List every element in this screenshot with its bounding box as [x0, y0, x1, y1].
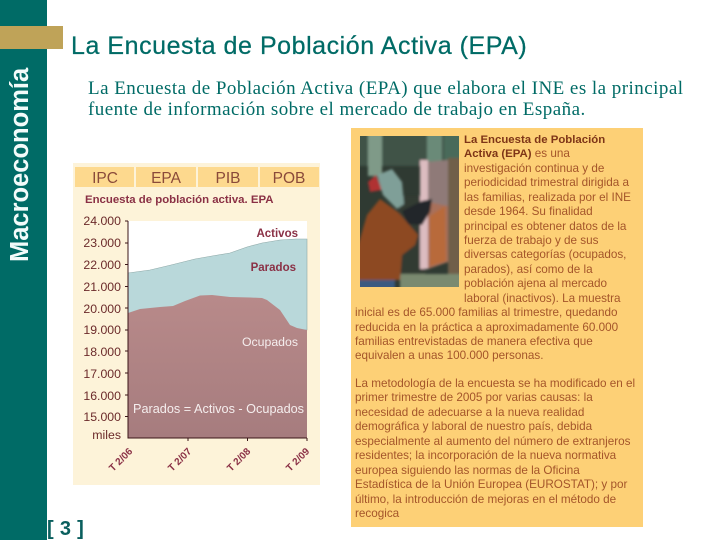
y axis: 18.000 — [83, 345, 121, 359]
body text — [355, 134, 635, 520]
body text: primer trimestre de 2005 por varias causas: la — [355, 391, 593, 404]
sidebar band — [0, 0, 47, 540]
body text: recogica — [355, 507, 399, 520]
body text: desde 1964. Su finalidad — [464, 205, 593, 218]
intro text — [88, 78, 684, 120]
tabs: PIB — [216, 170, 240, 187]
y axis: 17.000 — [83, 367, 121, 381]
tabs: IPC — [92, 170, 118, 187]
y axis: 15.000 — [83, 410, 121, 424]
series labels: Activos — [256, 228, 298, 240]
chart heading: Encuesta de población activa. EPA — [85, 194, 273, 206]
tabs: EPA — [151, 170, 182, 187]
body text: La Encuesta de Población — [464, 134, 605, 146]
y axis: 19.000 — [83, 323, 121, 337]
body text: las familias, realizada por el INE — [464, 191, 631, 204]
x axis labels: T 2/09 — [284, 446, 312, 474]
y axis — [83, 214, 307, 442]
tabs — [75, 167, 319, 187]
gold accent bar — [0, 26, 63, 49]
x axis labels: T 2/08 — [225, 446, 253, 474]
y axis: 21.000 — [83, 280, 121, 294]
body text: La metodología de la encuesta se ha modificado en el — [355, 377, 635, 390]
y axis: 24.000 — [83, 214, 121, 228]
body text: principal es obtener datos de la — [464, 220, 626, 233]
body text: investigación continua y de — [464, 162, 604, 175]
body text: reducida en la práctica a aproximadamente 60.000 — [355, 321, 618, 334]
x axis labels: T 2/06 — [107, 446, 135, 474]
body text: Estadística de la Unión Europea (EUROSTAT); y por — [355, 478, 627, 491]
x axis labels: T 2/07 — [166, 446, 194, 474]
sidebar label: Macroeconomía: Macroeconomía — [6, 68, 34, 262]
body text: periodicidad trimestral dirigida a — [464, 176, 629, 189]
x axis labels — [107, 446, 312, 474]
body text: especialmente al aumento del número de extranjeros — [355, 435, 630, 448]
y axis: 16.000 — [83, 389, 121, 403]
intro text: La Encuesta de Población Activa (EPA) que elabora el INE es la principal — [88, 78, 684, 99]
intro text: fuente de información sobre el mercado de trabajo en España. — [88, 99, 586, 120]
body text: fuerza de trabajo y de sus — [464, 234, 598, 247]
series labels: Ocupados — [242, 335, 298, 349]
panel: explanatory text — [351, 128, 643, 527]
body text: último, la introducción de mejoras en el método de — [355, 493, 616, 506]
photo: welder — [360, 136, 459, 287]
body text: europea siguiendo las normas de la Oficina — [355, 464, 580, 477]
formula: Parados = Activos - Ocupados — [133, 402, 304, 416]
y axis: 23.000 — [83, 236, 121, 250]
panel: EPA chart — [73, 163, 320, 485]
body text: población ajena al mercado — [464, 277, 607, 290]
body text: demográfica y laboral de nuestro país, debida — [355, 420, 592, 433]
y axis: miles — [92, 428, 121, 442]
y axis: 20.000 — [83, 302, 121, 316]
body text: laboral (inactivos). La muestra — [464, 292, 621, 305]
page number: [ 3 ] — [47, 518, 84, 540]
y axis: 22.000 — [83, 258, 121, 272]
series labels — [242, 228, 298, 349]
body text: residentes; la incorporación de la nueva normativa — [355, 449, 616, 462]
body text: Activa (EPA) es una — [464, 147, 570, 160]
body text: necesidad de adecuarse a la nueva realidad — [355, 406, 584, 419]
series labels: Parados — [251, 262, 296, 274]
title: La Encuesta de Población Activa (EPA) — [71, 32, 527, 60]
body text: equivalen a unas 100.000 personas. — [355, 349, 543, 362]
body text: familias entrevistadas de manera efectiva que — [355, 335, 593, 348]
plot area — [128, 221, 307, 438]
body text: inicial es de 65.000 familias al trimestre, quedando — [355, 306, 617, 319]
tabs: POB — [273, 170, 305, 187]
body text: diversas categorías (ocupados, — [464, 248, 626, 261]
body text: parados), así como de la — [464, 263, 593, 276]
